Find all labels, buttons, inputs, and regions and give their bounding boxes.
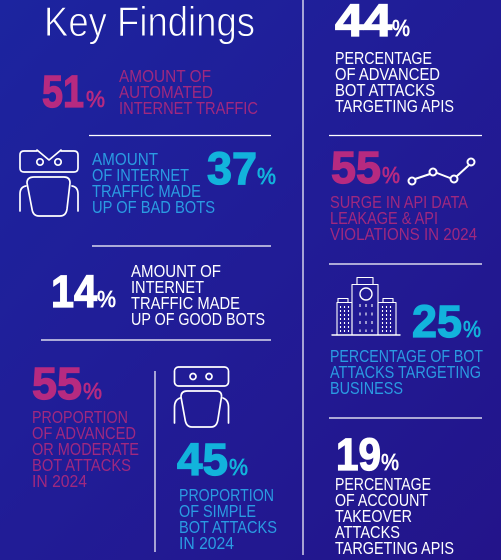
icon: bad bot — [20, 150, 78, 216]
stat: 55% advanced or moderate attacks: OF ADVANCED — [32, 423, 136, 443]
stat: 55% advanced or moderate attacks: OR MODERATE — [32, 439, 139, 459]
stat: 51% automated traffic: AMOUNT OF — [119, 66, 211, 86]
stat: 25% attacks on business: BUSINESS — [330, 378, 403, 398]
stat: 25% attacks on business: % — [463, 316, 481, 342]
stat: 55% advanced or moderate attacks: % — [83, 378, 102, 404]
stat: 37% bad bots: AMOUNT — [92, 149, 158, 169]
stat: 37% bad bots: TRAFFIC MADE — [92, 181, 201, 201]
stat: 37% bad bots: UP OF BAD BOTS — [92, 197, 215, 217]
icon: line chart — [408, 158, 474, 184]
stat: 37% bad bots — [92, 143, 276, 217]
stat: 44% advanced attacks on APIs — [335, 0, 454, 116]
stat: 51% automated traffic: 51 — [42, 66, 84, 117]
stat: 19% account takeover: TAKEOVER — [335, 506, 412, 526]
stat: 37% bad bots: 37 — [207, 143, 257, 194]
stat: 19% account takeover: 19 — [336, 429, 381, 480]
stat: 55% API data leakage surge: VIOLATIONS IN 2024 — [330, 224, 477, 244]
stat: 19% account takeover: PERCENTAGE — [335, 474, 431, 494]
stat: 44% advanced attacks on APIs: % — [392, 15, 410, 41]
stat: 45% simple attacks: % — [229, 454, 248, 480]
stat: 55% advanced or moderate attacks: BOT ATTACKS — [32, 455, 131, 475]
stat: 55% advanced or moderate attacks: 55 — [32, 358, 82, 409]
stat: 44% advanced attacks on APIs: TARGETING APIS — [335, 96, 454, 116]
stat: 55% API data leakage surge: 55 — [331, 142, 381, 193]
stat: 14% good bots: 14 — [51, 266, 97, 317]
stat: 45% simple attacks: OF SIMPLE — [179, 501, 256, 521]
stat: 25% attacks on business: 25 — [412, 296, 462, 347]
stat: 45% simple attacks: PROPORTION — [179, 485, 274, 505]
stat: 37% bad bots: % — [257, 163, 276, 189]
stat: 14% good bots: INTERNET — [131, 277, 204, 297]
stat: 51% automated traffic — [42, 66, 258, 118]
stat: 55% advanced or moderate attacks: PROPORTION — [32, 407, 128, 427]
stat: 37% bad bots: OF INTERNET — [92, 165, 189, 185]
stat: 51% automated traffic: INTERNET TRAFFIC — [119, 98, 258, 118]
stat: 14% good bots: AMOUNT OF — [131, 261, 221, 281]
icon: simple bot — [174, 367, 228, 427]
stat: 45% simple attacks — [177, 434, 277, 553]
stat: 14% good bots — [51, 261, 265, 329]
stat: 55% advanced or moderate attacks: IN 2024 — [32, 471, 87, 491]
stat: 45% simple attacks: 45 — [177, 434, 228, 485]
stat: 55% API data leakage surge: LEAKAGE & API — [330, 208, 438, 228]
stat: 19% account takeover — [335, 429, 454, 558]
stat: 14% good bots: UP OF GOOD BOTS — [131, 309, 265, 329]
stat: 55% advanced or moderate attacks — [32, 358, 139, 491]
stat: 44% advanced attacks on APIs: OF ADVANCED — [335, 64, 440, 84]
stat: 19% account takeover: % — [381, 449, 399, 475]
stat: 14% good bots: % — [97, 286, 116, 312]
stat: 45% simple attacks: IN 2024 — [179, 533, 234, 553]
stat: 55% API data leakage surge: SURGE IN API DATA — [330, 192, 468, 212]
stat: 14% good bots: TRAFFIC MADE — [131, 293, 240, 313]
stat: 55% API data leakage surge: % — [382, 162, 400, 188]
stat: 45% simple attacks: BOT ATTACKS — [179, 517, 277, 537]
stat: 19% account takeover: ATTACKS — [335, 522, 400, 542]
stat: 44% advanced attacks on APIs: PERCENTAGE — [335, 48, 432, 68]
stat: 55% API data leakage surge — [330, 142, 477, 244]
stat: 51% automated traffic: % — [86, 86, 105, 112]
icon: office buildings — [332, 278, 400, 335]
stat: 44% advanced attacks on APIs: BOT ATTACKS — [335, 80, 435, 100]
stat: 19% account takeover: TARGETING APIS — [335, 538, 454, 558]
stat: 25% attacks on business — [330, 296, 483, 398]
stat: 19% account takeover: OF ACCOUNT — [335, 490, 428, 510]
stat: 51% automated traffic: AUTOMATED — [119, 82, 213, 102]
